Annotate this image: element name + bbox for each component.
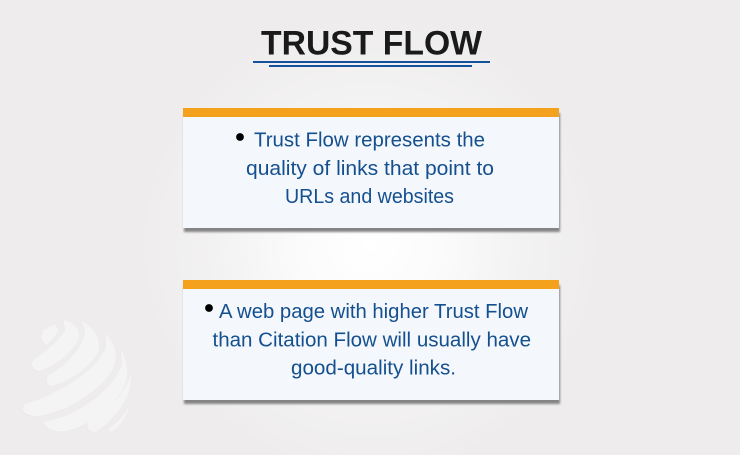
title double underline — [253, 61, 490, 67]
panel text: Trust Flow represents the — [254, 130, 485, 152]
title: TRUST FLOW — [261, 24, 483, 62]
panel: trust flow definition — [183, 108, 560, 232]
panel text: quality of links that point to — [246, 158, 494, 180]
panel text: good-quality links. — [291, 358, 456, 380]
panel text: A web page with higher Trust Flow — [219, 301, 529, 323]
panel text: than Citation Flow will usually have — [212, 330, 531, 352]
bullet — [205, 304, 213, 312]
panel text — [212, 301, 531, 380]
icon: faded globe — [23, 320, 131, 432]
panel text: URLs and websites — [285, 186, 454, 208]
panel text — [246, 130, 494, 208]
bullet — [236, 133, 244, 141]
panel: higher trust flow note — [183, 280, 560, 404]
